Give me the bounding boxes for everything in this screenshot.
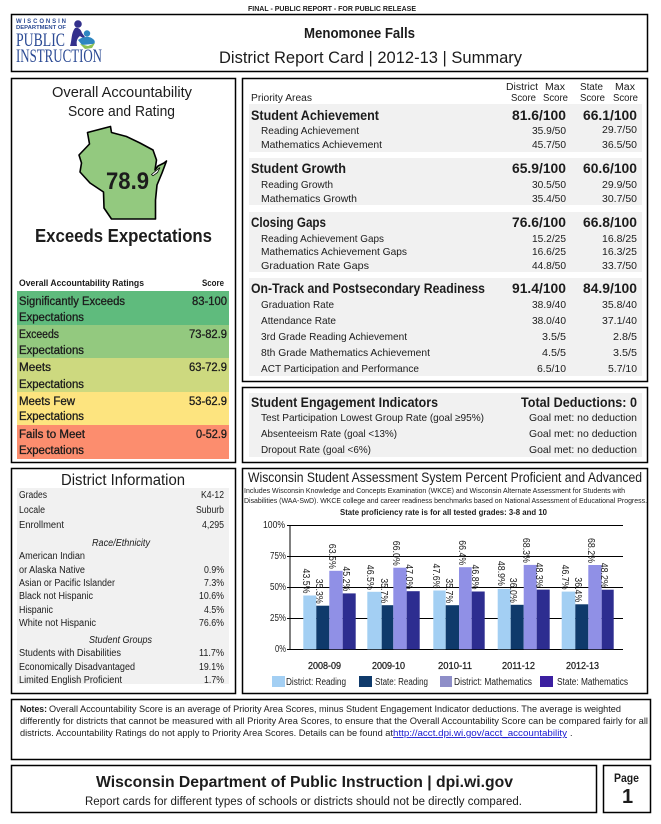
section: student achievement: 35.9/50 xyxy=(532,125,566,137)
general facts: K4-12 xyxy=(201,490,224,501)
y axis labels: 75% xyxy=(270,550,286,562)
chart legend: District: Mathematics xyxy=(454,677,532,688)
section: on-track and postsecondary readiness: 3.5/5 xyxy=(542,331,566,343)
rating row: meets: Meets xyxy=(19,362,51,374)
indicator: dropout xyxy=(261,444,637,456)
section: student growth: Mathematics Growth xyxy=(261,193,357,205)
section: on-track and postsecondary readiness: 8th Grade Mathematics Achievement xyxy=(261,347,430,359)
heading: Overall Accountability xyxy=(52,85,193,101)
rating row: meets xyxy=(17,358,229,392)
bars 2009-10: 35.7% xyxy=(378,578,389,603)
panel: district information xyxy=(12,468,236,694)
logo: Wisconsin Department of Public Instruction xyxy=(16,19,102,67)
panel: header xyxy=(12,14,648,72)
y axis labels xyxy=(263,519,286,655)
logo: Wisconsin Department of Public Instruction: INSTRUCTION xyxy=(16,46,102,67)
rating row: exceeds: Exceeds xyxy=(19,329,59,341)
section: student growth xyxy=(249,158,642,205)
section: closing gaps: Closing Gaps xyxy=(251,215,326,230)
table header: Overall Accountability Ratings xyxy=(19,278,144,288)
x axis labels xyxy=(308,661,599,672)
section: student growth: 29.9/50 xyxy=(602,179,637,191)
footer title: Wisconsin Department of Public Instruction | dpi.wi.gov xyxy=(96,774,513,791)
indicator: absenteeism: Absenteeism Rate (goal <13%) xyxy=(261,428,397,440)
section: student achievement: Mathematics Achievement xyxy=(261,139,382,151)
section: closing gaps: 66.8/100 xyxy=(583,215,637,230)
x axis labels: 2012-13 xyxy=(566,661,599,672)
panel: page number xyxy=(604,766,650,812)
x axis labels: 2008-09 xyxy=(308,661,341,672)
bars 2008-09 xyxy=(300,544,356,649)
section: student growth: Student Growth xyxy=(251,161,346,176)
chart note: State proficiency rate is for all tested grades: 3-8 and 10 xyxy=(340,507,547,517)
student groups xyxy=(19,635,224,686)
total deductions: Total Deductions: 0 xyxy=(521,395,637,410)
section: on-track and postsecondary readiness: 6.5/10 xyxy=(537,363,566,375)
rating row: significantly exceeds: 83-100 xyxy=(192,296,227,308)
rating row: exceeds: Expectations xyxy=(19,345,84,357)
panel: priority areas xyxy=(242,78,648,382)
panel: notes: http://acct.dpi.wi.gov/acct_accountability xyxy=(393,728,568,738)
race and ethnicity: 0.9% xyxy=(204,565,224,576)
table header xyxy=(19,278,224,288)
rating row: meets few: 53-62.9 xyxy=(189,396,227,408)
bars 2010-11: 47.6% xyxy=(430,564,441,589)
status line: FINAL - PUBLIC REPORT - FOR PUBLIC RELEASE xyxy=(248,6,416,13)
section: on-track and postsecondary readiness: 5.7/10 xyxy=(608,363,637,375)
panel: notes: Overall Accountability Score is an average of Priority Area Scores, minus Student Engagement Indicator deductions. The average is weighted xyxy=(49,704,621,714)
race and ethnicity: Race/Ethnicity xyxy=(92,538,151,549)
column headers: Max xyxy=(545,82,565,93)
bars 2008-09: 63.5% xyxy=(326,544,337,569)
student groups: 11.7% xyxy=(199,648,224,659)
bars 2011-12: 68.3% xyxy=(520,538,531,563)
indicator: dropout: Dropout Rate (goal <6%) xyxy=(261,444,371,456)
bar chart xyxy=(263,519,623,672)
column headers: Score xyxy=(613,93,638,104)
section: on-track and postsecondary readiness: 38.0/40 xyxy=(532,315,566,327)
general facts: Suburb xyxy=(196,505,224,516)
section: on-track and postsecondary readiness: 2.8/5 xyxy=(613,331,637,343)
column headers: Priority Areas xyxy=(251,93,312,104)
footer caveat: Report cards for different types of schools or districts should not be directly compared. xyxy=(85,796,522,808)
section: on-track and postsecondary readiness: 91.4/100 xyxy=(512,281,566,296)
indicator: test participation: Test Participation Lowest Group Rate (goal ≥95%) xyxy=(261,412,484,424)
section: student achievement: 66.1/100 xyxy=(583,108,637,123)
logo: Wisconsin Department of Public Instruction: PUBLIC xyxy=(16,30,65,51)
section: on-track and postsecondary readiness: 37.1/40 xyxy=(602,315,637,327)
panel: notes: . xyxy=(570,728,573,738)
section: on-track and postsecondary readiness: Attendance Rate xyxy=(261,315,336,327)
bars 2009-10: 66.0% xyxy=(390,541,401,566)
bars 2010-11: 66.4% xyxy=(456,540,467,565)
section: student achievement: Reading Achievement xyxy=(261,125,359,137)
engagement heading: Student Engagement Indicators xyxy=(251,395,438,410)
section: student achievement: 45.7/50 xyxy=(532,139,566,151)
general facts: Grades xyxy=(19,490,47,501)
section: closing gaps: 16.6/25 xyxy=(532,246,566,258)
section: student achievement: 36.5/50 xyxy=(602,139,637,151)
section: on-track and postsecondary readiness: On-Track and Postsecondary Readiness xyxy=(251,281,485,296)
district information heading: District Information xyxy=(61,472,185,489)
bars 2010-11: 46.8% xyxy=(469,564,480,590)
chart description xyxy=(244,486,647,505)
section: on-track and postsecondary readiness: Graduation Rate xyxy=(261,299,334,311)
bars 2012-13: 46.7% xyxy=(559,565,570,590)
rating: Exceeds Expectations xyxy=(35,226,212,246)
general facts: Locale xyxy=(19,505,45,516)
rating row: significantly exceeds: Expectations xyxy=(19,312,84,324)
section: closing gaps: 44.8/50 xyxy=(532,260,566,272)
section: student achievement: Student Achievement xyxy=(251,108,379,123)
section: student growth: 65.9/100 xyxy=(512,161,566,176)
section: closing gaps: 33.7/50 xyxy=(602,260,637,272)
column headers: District xyxy=(506,82,538,93)
section: closing gaps: 76.6/100 xyxy=(512,215,566,230)
indicator: absenteeism: Goal met: no deduction xyxy=(529,428,637,440)
rating row: meets few xyxy=(17,392,229,425)
section: student growth: 30.7/50 xyxy=(602,193,637,205)
ratings table xyxy=(17,278,229,459)
rating row: fails to meet: Expectations xyxy=(19,445,84,457)
indicator: test participation xyxy=(261,412,637,424)
race and ethnicity: 10.6% xyxy=(199,591,224,602)
report card subtitle: District Report Card | 2012-13 | Summary xyxy=(219,49,523,67)
section: student growth: Reading Growth xyxy=(261,179,333,191)
column headers: Score xyxy=(580,93,605,104)
bars 2008-09: 45.2% xyxy=(340,566,351,591)
bars 2012-13 xyxy=(559,538,614,649)
panel: notes: districts. Accountability Ratings do not apply to Priority Area Scores. Details can be found at xyxy=(20,728,393,738)
bars 2012-13: 68.2% xyxy=(585,538,596,563)
panel: overall accountability score and rating xyxy=(12,78,236,462)
bars 2011-12: 48.3% xyxy=(533,563,544,588)
section: on-track and postsecondary readiness: 3.5/5 xyxy=(613,347,637,359)
panel: footer xyxy=(12,766,596,812)
bars 2009-10: 46.5% xyxy=(364,565,375,590)
student groups: Students with Disabilities xyxy=(19,648,121,659)
heading xyxy=(52,85,193,120)
y axis labels: 25% xyxy=(270,612,286,624)
icon: Wisconsin map xyxy=(79,126,166,219)
bars 2009-10: 47.0% xyxy=(403,564,414,589)
section: on-track and postsecondary readiness: 84.9/100 xyxy=(583,281,637,296)
section: closing gaps xyxy=(249,212,642,272)
race and ethnicity: or Alaska Native xyxy=(19,565,85,576)
bars 2008-09: 35.3% xyxy=(313,579,324,604)
y axis labels: 0% xyxy=(275,643,286,655)
section: student growth: 30.5/50 xyxy=(532,179,566,191)
column headers: State xyxy=(580,82,603,93)
panel: page number: 1 xyxy=(622,786,633,808)
logo: Wisconsin Department of Public Instruction: DEPARTMENT OF xyxy=(16,25,66,31)
section: on-track and postsecondary readiness xyxy=(249,278,642,376)
student groups: 19.1% xyxy=(199,662,224,673)
race and ethnicity: American Indian xyxy=(19,551,85,562)
panel: notes: differently for districts that cannot be measured with all Priority Area Scores, to ensure that the Overall Accountability Score can be compared fairly for all xyxy=(20,716,648,726)
race and ethnicity: 4.5% xyxy=(204,605,224,616)
x axis labels: 2010-11 xyxy=(438,661,472,672)
section: student growth: 35.4/50 xyxy=(532,193,566,205)
x axis labels: 2009-10 xyxy=(372,661,405,672)
panel: notes: Notes: xyxy=(20,704,47,714)
table header: Score xyxy=(202,278,224,288)
rating row: meets few: Meets Few xyxy=(19,396,76,408)
heading: Score and Rating xyxy=(68,104,175,120)
indicator: absenteeism xyxy=(261,428,637,440)
section: closing gaps: Graduation Rate Gaps xyxy=(261,260,369,272)
bars 2009-10 xyxy=(364,541,420,649)
bars 2010-11: 35.7% xyxy=(443,578,454,603)
rating row: fails to meet: Fails to Meet xyxy=(19,429,86,441)
rating row: fails to meet: 0-52.9 xyxy=(196,429,227,441)
section: student achievement xyxy=(249,104,642,152)
section: on-track and postsecondary readiness: 3rd Grade Reading Achievement xyxy=(261,331,407,343)
section: on-track and postsecondary readiness: 35.8/40 xyxy=(602,299,637,311)
rating row: meets few: Expectations xyxy=(19,411,84,423)
bars 2010-11 xyxy=(430,540,485,649)
chart legend: State: Mathematics xyxy=(557,677,628,688)
y axis labels: 50% xyxy=(270,581,286,593)
chart legend: State: Reading xyxy=(375,677,428,688)
rating row: exceeds xyxy=(17,325,229,358)
race and ethnicity: 76.6% xyxy=(199,618,224,629)
section: closing gaps: Reading Achievement Gaps xyxy=(261,233,384,245)
race and ethnicity: Black not Hispanic xyxy=(19,591,93,602)
chart legend xyxy=(272,676,628,688)
general facts: Enrollment xyxy=(19,520,64,531)
bars 2012-13: 48.2% xyxy=(598,563,609,588)
rating row: meets: 63-72.9 xyxy=(189,362,227,374)
student groups: Student Groups xyxy=(89,635,152,646)
indicator: dropout: Goal met: no deduction xyxy=(529,444,637,456)
rating row: significantly exceeds xyxy=(17,291,229,325)
race and ethnicity: White not Hispanic xyxy=(19,618,96,629)
column headers: Score xyxy=(543,93,568,104)
section: student growth: 60.6/100 xyxy=(583,161,637,176)
section: student achievement: 29.7/50 xyxy=(602,124,637,136)
bars 2011-12: 48.9% xyxy=(495,561,506,586)
bars 2011-12 xyxy=(495,538,550,649)
bars 2012-13: 36.4% xyxy=(572,577,583,602)
section: closing gaps: 16.3/25 xyxy=(602,246,637,258)
student groups: 1.7% xyxy=(204,675,224,686)
section: closing gaps: 15.2/25 xyxy=(532,233,566,245)
district name: Menomonee Falls xyxy=(304,25,415,42)
section: on-track and postsecondary readiness: 38.9/40 xyxy=(532,299,566,311)
x axis labels: 2011-12 xyxy=(502,661,535,672)
student groups: Limited English Proficient xyxy=(19,675,122,686)
panel: proficiency chart xyxy=(242,468,648,694)
logo: Wisconsin Department of Public Instruction: WISCONSIN xyxy=(16,19,66,25)
section: on-track and postsecondary readiness: 4.5/5 xyxy=(542,347,566,359)
chart legend: District: Reading xyxy=(286,677,346,688)
race and ethnicity: Hispanic xyxy=(19,605,53,616)
column headers: Score xyxy=(511,93,536,104)
general facts: 4,295 xyxy=(202,520,224,531)
student groups: Economically Disadvantaged xyxy=(19,662,135,673)
section: student achievement: 81.6/100 xyxy=(512,108,566,123)
bars 2008-09: 43.5% xyxy=(300,568,311,594)
panel: notes xyxy=(12,700,650,760)
rating row: fails to meet xyxy=(17,425,229,459)
panel: page number: Page xyxy=(614,773,639,785)
bars 2011-12: 36.0% xyxy=(507,578,518,603)
rating row: significantly exceeds: Significantly Exceeds xyxy=(19,296,125,308)
race and ethnicity: Asian or Pacific Islander xyxy=(19,578,116,589)
chart description: Includes Wisconsin Knowledge and Concepts Examination (WKCE) and Wisconsin Alternate Assessment for Students with xyxy=(244,486,625,495)
section: on-track and postsecondary readiness: ACT Participation and Performance xyxy=(261,363,419,375)
y axis labels: 100% xyxy=(263,519,285,531)
rating row: meets: Expectations xyxy=(19,379,84,391)
race and ethnicity xyxy=(19,538,224,629)
column headers: Max xyxy=(615,82,635,93)
race and ethnicity: 7.3% xyxy=(204,578,224,589)
rating row: exceeds: 73-82.9 xyxy=(189,329,227,341)
general facts xyxy=(19,490,224,531)
section: closing gaps: Mathematics Achievement Gaps xyxy=(261,246,407,258)
indicator: test participation: Goal met: no deduction xyxy=(529,412,637,424)
column headers xyxy=(251,82,638,104)
overall score: 78.9 xyxy=(106,168,149,195)
section: closing gaps: 16.8/25 xyxy=(602,233,637,245)
panel: student engagement indicators xyxy=(242,388,648,462)
